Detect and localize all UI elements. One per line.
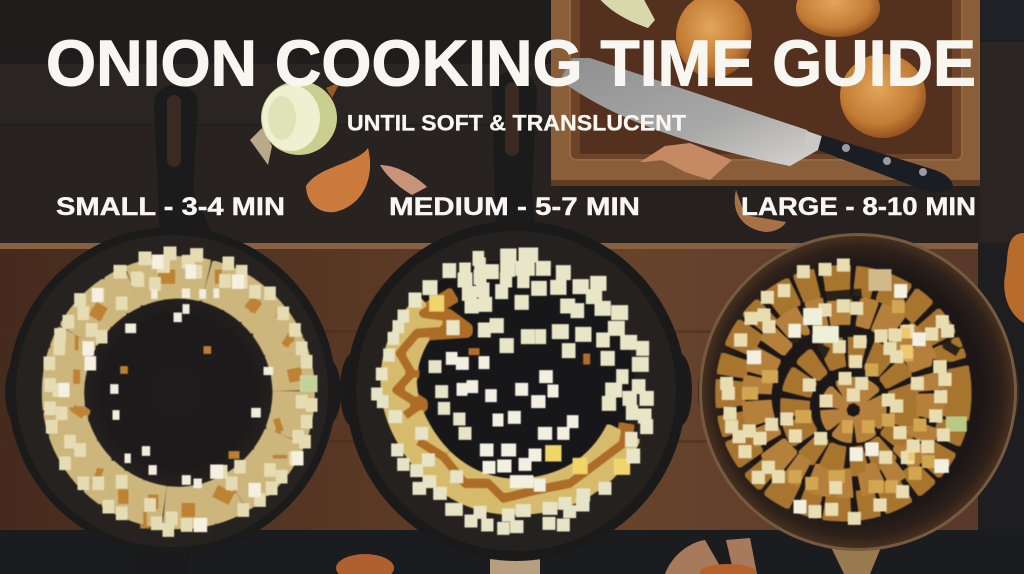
cutting board	[551, 0, 980, 186]
label: medium: MEDIUM - 5-7 MIN	[389, 193, 640, 221]
onions large	[722, 265, 965, 518]
pan: small	[5, 85, 341, 574]
title: ONION COOKING TIME GUIDE	[46, 26, 976, 100]
pan: medium	[340, 70, 692, 574]
label: large: LARGE - 8-10 MIN	[741, 193, 976, 221]
pan handle small	[154, 85, 215, 240]
knife	[560, 58, 953, 192]
wooden serving board	[0, 243, 978, 530]
pan handle large	[830, 545, 882, 574]
onions on cutting board	[597, 0, 926, 180]
pan: large	[698, 233, 1019, 574]
half onion	[250, 81, 340, 165]
pan handle medium	[492, 70, 537, 235]
onion skins	[306, 148, 1024, 574]
onions medium	[373, 255, 652, 528]
subtitle: UNTIL SOFT & TRANSLUCENT	[347, 110, 687, 136]
label: small: SMALL - 3-4 MIN	[56, 193, 285, 221]
onion ring small	[45, 253, 316, 530]
